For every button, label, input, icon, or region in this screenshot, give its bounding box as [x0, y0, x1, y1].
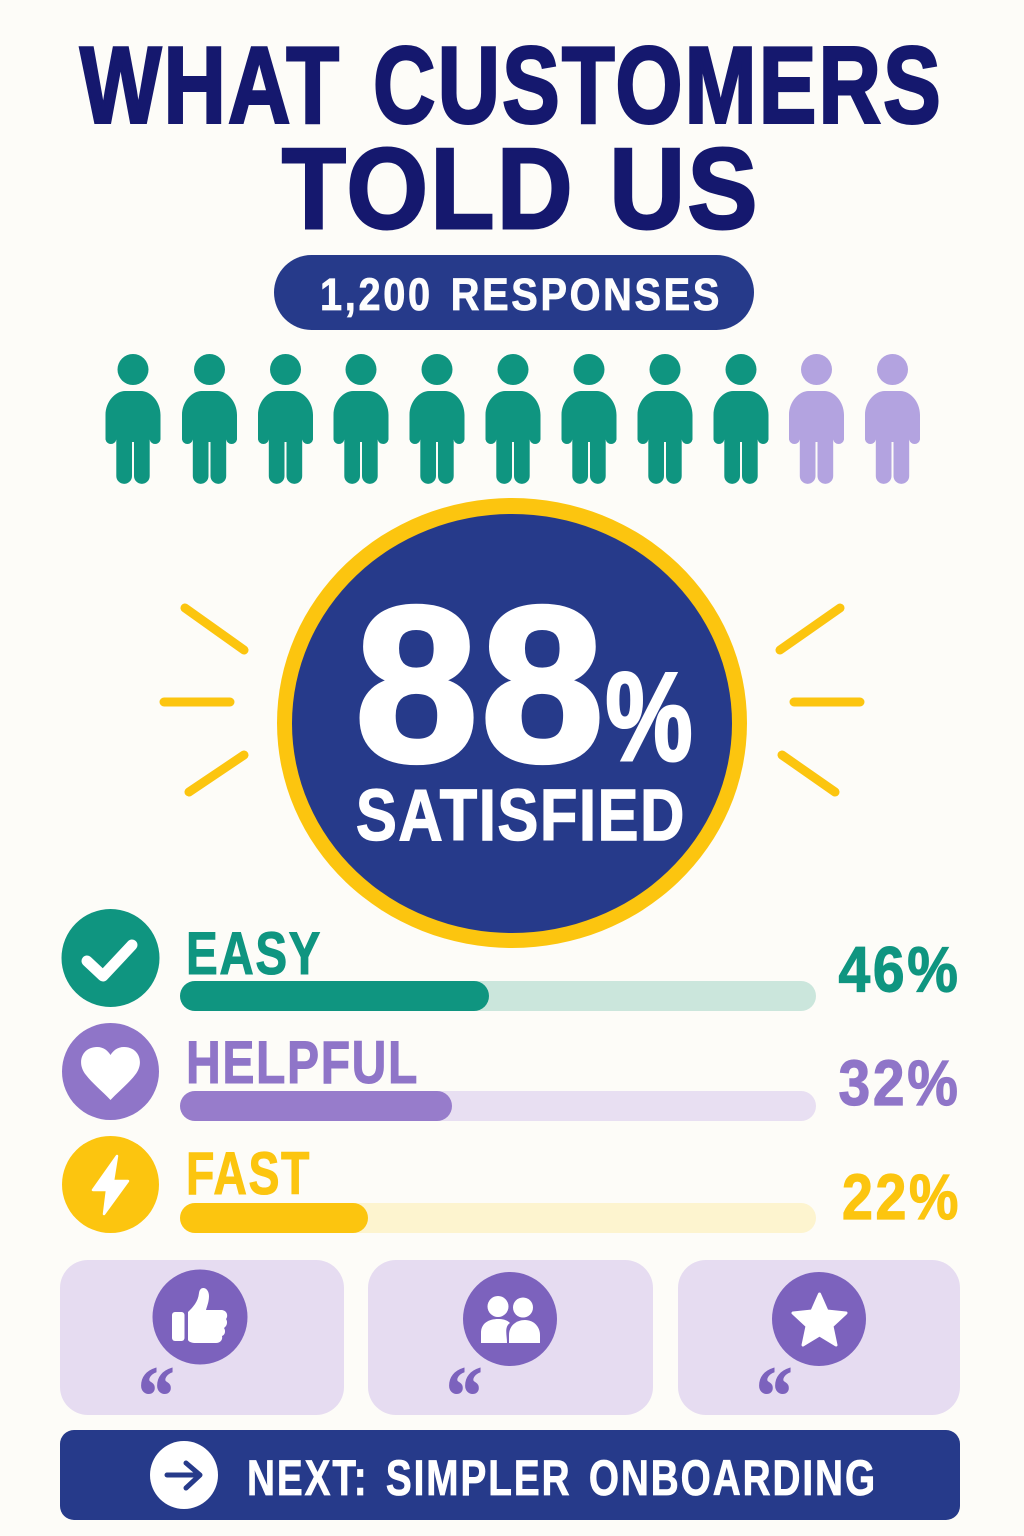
quote mark: “ — [138, 1350, 174, 1443]
icon: arrow — [150, 1441, 218, 1509]
big number: 88 — [355, 560, 607, 808]
card: community — [368, 1260, 653, 1443]
fast label: FAST — [186, 1140, 311, 1207]
call to action banner — [60, 1430, 960, 1520]
satisfaction circle: 88% satisfied — [277, 498, 747, 948]
title — [80, 24, 943, 253]
icon: lightning bolt — [62, 1136, 159, 1233]
helpful bar — [180, 1091, 816, 1121]
percent sign: % — [606, 648, 692, 787]
icon: heart — [62, 1023, 159, 1120]
fast bar — [180, 1203, 816, 1233]
row: fast 22% — [62, 1136, 961, 1233]
helpful value: 32% — [838, 1047, 960, 1119]
icon: check — [62, 909, 160, 1007]
badge: 1,200 responses: 1,200 RESPONSES — [320, 269, 722, 320]
icon: star — [772, 1272, 866, 1366]
card: thumbs up — [60, 1260, 344, 1443]
burst rays right — [780, 608, 860, 792]
helpful label: HELPFUL — [186, 1029, 419, 1096]
easy label: EASY — [186, 920, 322, 987]
quote mark: “ — [446, 1350, 482, 1443]
badge: 1,200 responses — [274, 255, 754, 330]
title: TOLD US — [282, 125, 760, 253]
burst rays left — [164, 608, 244, 792]
icon: people — [463, 1272, 557, 1366]
card: star — [678, 1260, 960, 1443]
pictogram: 9 of 11 people satisfied — [106, 354, 920, 484]
row: easy 46% — [62, 909, 960, 1011]
icon: thumbs up — [152, 1270, 248, 1364]
fast value: 22% — [842, 1161, 961, 1233]
easy value: 46% — [838, 934, 960, 1006]
satisfied label: SATISFIED — [356, 776, 686, 856]
quote mark: “ — [756, 1350, 792, 1443]
row: helpful 32% — [62, 1023, 960, 1121]
easy bar — [180, 981, 816, 1011]
